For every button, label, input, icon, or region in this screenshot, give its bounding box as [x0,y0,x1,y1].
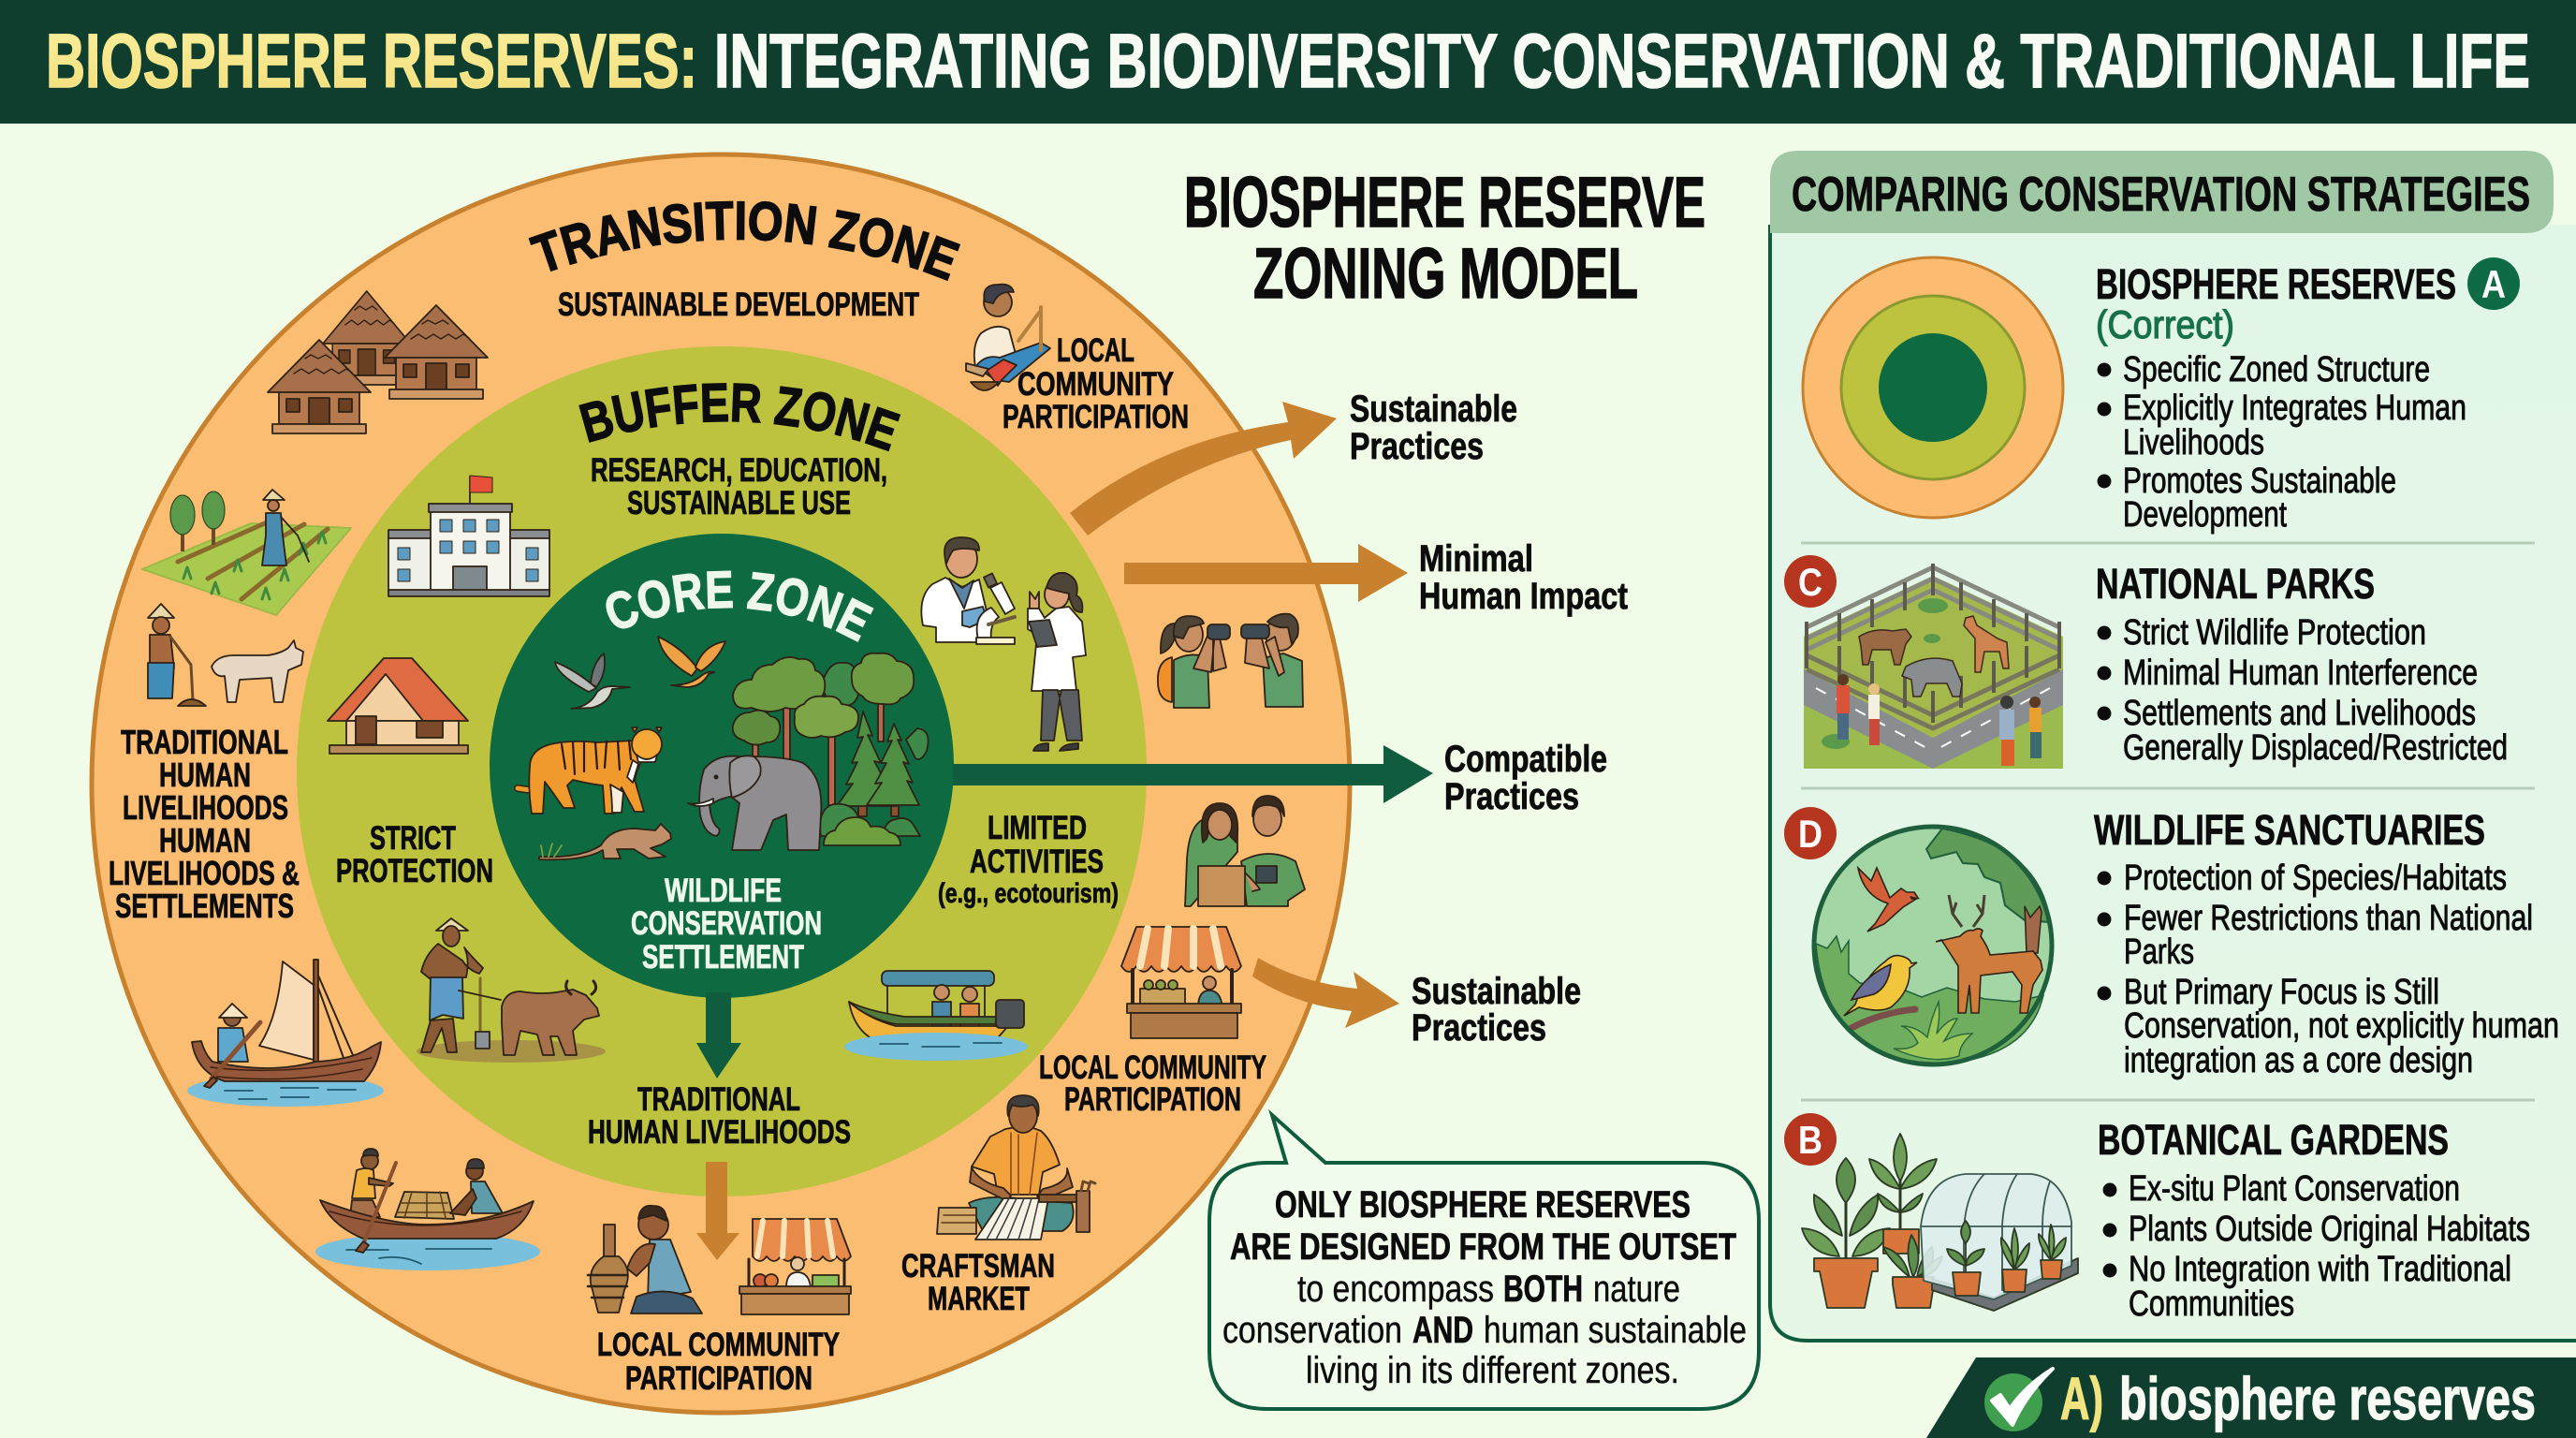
label: local community participation right [1039,1049,1266,1118]
callout: key takeaway: human sustainable [1484,1310,1747,1351]
icon: wildlife sanctuary scene [1814,827,2052,1064]
section: biosphere reserves: BIOSPHERE RESERVES [2096,260,2456,308]
bullet list C [2098,613,2508,768]
callout: key takeaway: living in its different zones. [1306,1350,1679,1391]
arrow label: minimal human impact: Minimal [1419,538,1533,580]
heading: zoning model [1184,163,1705,314]
section: national parks [2096,560,2508,768]
label: local community participation top: LOCAL [1057,332,1134,369]
callout: key takeaway: BOTH [1503,1269,1583,1310]
label: limited activities: (e.g., ecotourism) [938,878,1119,909]
bullet list A: Livelihoods [2123,423,2264,462]
label: traditional human livelihoods left: LIVELIHOODS & [109,854,300,892]
icon: forest trees [733,653,929,845]
bullet list A: Promotes Sustainable [2123,462,2396,501]
label: traditional human livelihoods left: HUMAN [159,756,251,794]
label: traditional human livelihoods left: LIVELIHOODS [123,788,288,827]
label: limited activities: ACTIVITIES [970,844,1104,880]
bullet list A: Specific Zoned Structure [2123,350,2430,389]
label: local community participation bottom [597,1327,840,1397]
badge C [1784,555,1837,608]
buffer zone subtitle [591,452,887,521]
arrow label: compatible practices: Practices [1444,776,1579,817]
label: traditional human livelihoods bottom: TRADITIONAL [637,1081,800,1118]
back plant [1869,1134,1937,1254]
label: traditional human livelihoods bottom [588,1081,851,1151]
label: traditional human livelihoods left: TRADITIONAL [121,723,288,761]
bullet list A: Explicitly Integrates Human [2123,389,2466,428]
callout: key takeaway [1209,1115,1759,1409]
bullet list A: Development [2123,495,2287,535]
icon: house [328,658,468,754]
female scientist [1028,573,1086,751]
panel body [1770,225,2576,1341]
label: craftsman market: MARKET [928,1281,1030,1317]
label: craftsman market [901,1248,1055,1317]
icon: research school building [388,476,549,596]
icon: grey bird [555,653,630,709]
core zone circle [490,534,954,998]
label: limited activities [938,810,1119,909]
label: strict protection: STRICT [370,820,456,857]
bullet list D: But Primary Focus is Still [2124,973,2439,1012]
bullet list C: Minimal Human Interference [2123,653,2478,693]
label: local community participation bottom: LOCAL COMMUNITY [597,1327,840,1363]
panel header [1770,151,2554,233]
heading: zoning model: ZONING MODEL [1253,234,1638,314]
section: botanical gardens: BOTANICAL GARDENS [2098,1116,2449,1164]
icon: market stall bottom [739,1219,851,1314]
bullet list D: Parks [2124,932,2194,972]
buffer zone heading: BUFFER ZONE [578,383,900,451]
zoning model diagram [90,152,1352,1416]
arrow: compatible practices [953,745,1433,803]
arrow: core to livelihoods [696,992,741,1078]
icon: artisan with pottery [588,1206,702,1313]
panel: comparing conservation strategies [1770,151,2576,1341]
label: traditional human livelihoods bottom: HUMAN LIVELIHOODS [588,1114,851,1151]
arrow: livelihoods to community [696,1162,739,1260]
transition zone heading: TRANSITION ZONE [528,200,960,281]
section: botanical gardens [2098,1116,2530,1324]
buffer zone subtitle: SUSTAINABLE USE [627,485,851,521]
title highlight: BIOSPHERE RESERVES: [46,19,697,104]
label: local community participation right: PARTICIPATION [1064,1081,1241,1118]
bullet list D [2098,858,2559,1080]
badge D: D [1798,812,1822,856]
buffer zone circle [297,346,1147,1196]
icon: scientists with microscope [921,537,1086,751]
icon: tiger [518,727,662,814]
callout: key takeaway: conservation [1222,1310,1402,1351]
callout: key takeaway: nature [1593,1269,1680,1310]
arrow label: sustainable practices lower: Sustainable [1412,971,1581,1012]
arrow: sustainable practices upper [1070,402,1337,536]
girl with binoculars [1158,616,1230,708]
arrow label: sustainable practices upper [1350,389,1517,467]
icon: fenced national park [1804,564,2063,769]
icon: craftsman weaving [937,1095,1095,1240]
label: local community participation bottom: PARTICIPATION [625,1360,812,1397]
badge A: A [2481,262,2506,306]
badge B [1784,1113,1837,1166]
icon: birdwatchers [1158,614,1303,708]
label: traditional human livelihoods left [109,723,300,925]
icon: farmer with cow [148,604,303,706]
label: traditional human livelihoods left: HUMAN [159,821,251,859]
heading: zoning model: BIOSPHERE RESERVE [1184,163,1705,242]
core zone label: SETTLEMENT [642,939,804,976]
section: biosphere reserves [2096,257,2520,535]
big plant [1802,1158,1890,1308]
badge B: B [1798,1118,1822,1162]
bullet list B: Communities [2129,1284,2294,1324]
callout: key takeaway: to encompass [1297,1269,1494,1310]
core zone label [631,873,822,976]
label: traditional human livelihoods left: SETTLEMENTS [115,887,294,925]
bullet list C: Strict Wildlife Protection [2123,613,2426,653]
core zone label: WILDLIFE [665,873,782,909]
label: local community participation top: PARTICIPATION [1003,399,1189,435]
arrow: sustainable practices lower [1252,958,1399,1028]
icon: orange bird [658,637,725,687]
icon: check mark [1984,1369,2053,1431]
icon: farmland with farmer [142,490,351,615]
icon: zoned circles [1803,257,2063,518]
core zone label: CONSERVATION [631,905,822,942]
icon: weaver at loom [966,285,1050,390]
arrow label: compatible practices [1444,739,1607,817]
badge C: C [1798,560,1822,604]
icon: couple of local guides [1185,796,1305,906]
label: craftsman market: CRAFTSMAN [901,1248,1055,1284]
arrow: minimal human impact [1124,544,1408,602]
icon: tour boat [844,971,1028,1061]
icon: potted plants and greenhouse [1802,1134,2078,1311]
icon: elephant [688,756,821,850]
greenhouse [1921,1174,2078,1311]
answer banner [1926,1357,2576,1438]
arrow label: sustainable practices upper: Sustainable [1350,389,1517,430]
transition zone subtitle: SUSTAINABLE DEVELOPMENT [558,286,919,323]
icon: sailboat [187,960,384,1107]
bullet list B [2103,1169,2530,1324]
icon: market stall right [1121,927,1241,1038]
male scientist [921,537,987,642]
arrow label: sustainable practices upper: Practices [1350,426,1484,467]
icon: village huts [268,291,488,433]
callout: key takeaway: AND [1412,1310,1473,1351]
label: local community participation top [1003,332,1189,435]
buffer zone subtitle: RESEARCH, EDUCATION, [591,452,887,489]
label: local community participation top: COMMUNITY [1017,366,1174,403]
icon: ploughman with ox [417,918,606,1063]
bullet list A [2098,350,2466,535]
transition zone circle [92,154,1350,1413]
core zone heading: CORE ZONE [606,571,874,642]
arrow label: sustainable practices lower [1412,971,1581,1049]
arrow label: compatible practices: Compatible [1444,739,1607,780]
callout: key takeaway: ARE DESIGNED FROM THE OUTSET [1230,1226,1736,1268]
section: national parks: NATIONAL PARKS [2096,560,2375,608]
front plant [1883,1235,1942,1308]
correct note: (Correct) [2096,302,2234,346]
callout: key takeaway: ONLY BIOSPHERE RESERVES [1275,1184,1690,1225]
bullet list C: Settlements and Livelihoods [2123,694,2476,733]
badge D [1784,807,1837,859]
arrow label: sustainable practices lower: Practices [1412,1007,1546,1049]
icon: canoe with fishermen [315,1149,540,1270]
title banner [0,0,2576,124]
answer text: A) [2060,1365,2103,1432]
microscope [976,573,1015,644]
label: strict protection: PROTECTION [336,853,493,889]
label: strict protection [336,820,493,889]
bullet list D: integration as a core design [2124,1041,2473,1080]
icon: mongoose [539,824,671,859]
arrow label: minimal human impact [1419,538,1628,617]
bullet list B: Ex-situ Plant Conservation [2129,1169,2460,1209]
arrow label: minimal human impact: Human Impact [1419,576,1628,617]
badge A [2467,257,2520,310]
boy with binoculars [1241,614,1303,707]
label: limited activities: LIMITED [988,810,1087,846]
section: wildlife sanctuaries [2094,806,2559,1080]
label: local community participation right: LOCAL COMMUNITY [1039,1049,1266,1086]
